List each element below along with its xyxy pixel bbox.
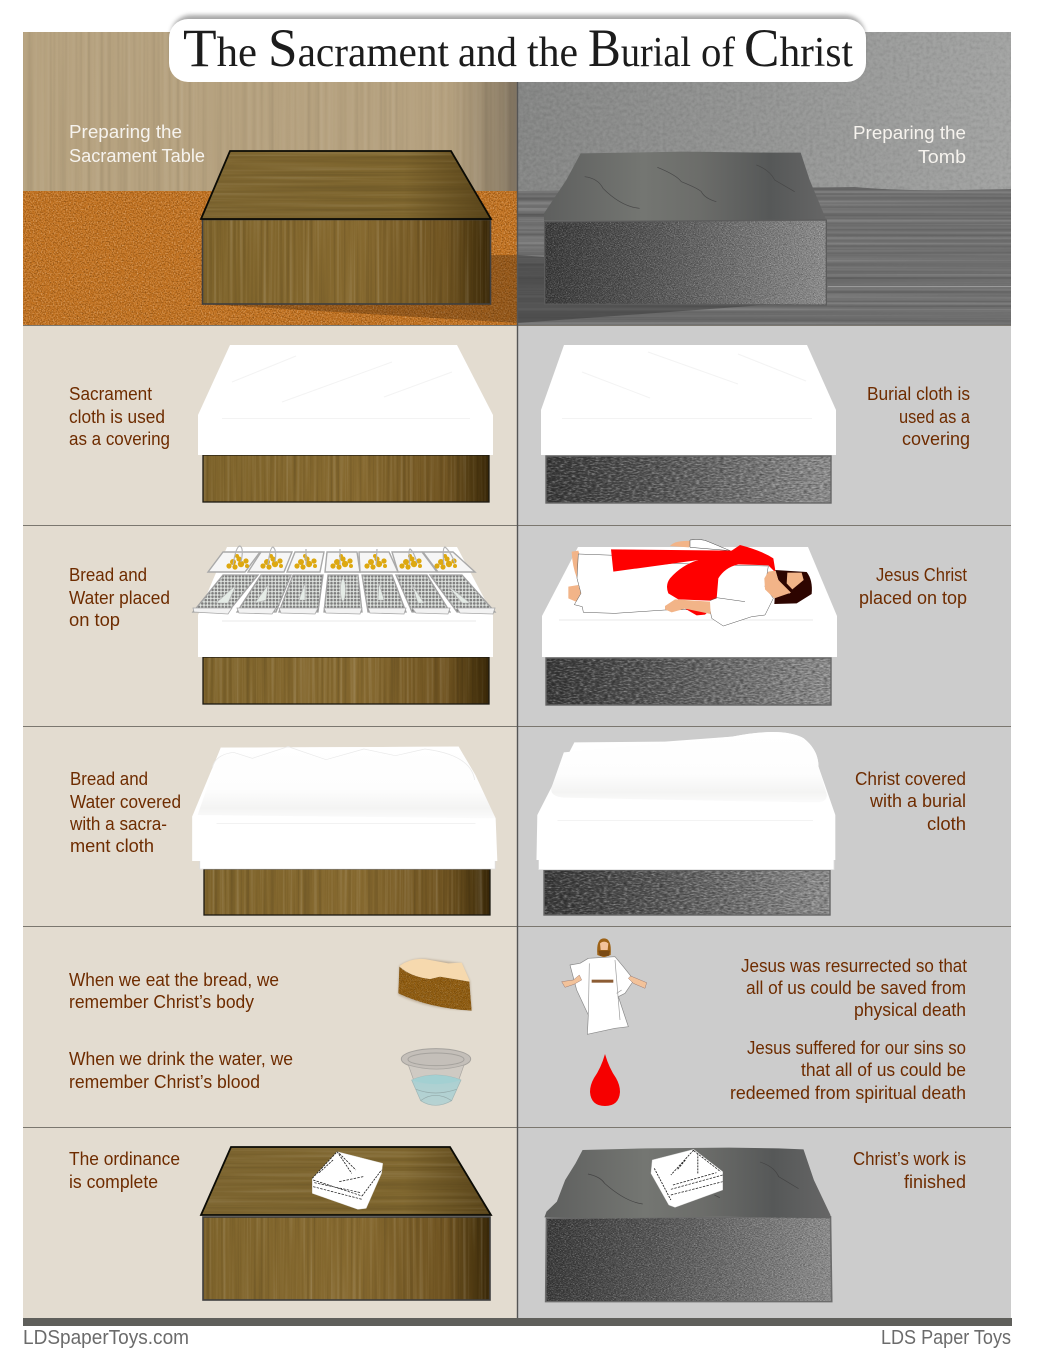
text: Christ covered: with a burial <box>869 791 966 811</box>
front outline <box>203 1217 490 1300</box>
stone slab <box>544 1148 832 1302</box>
text: ordinance complete: is complete <box>69 1172 158 1192</box>
table front <box>204 869 490 915</box>
text: burial cloth: used as a <box>899 407 971 427</box>
tray centres <box>216 579 470 603</box>
stone front <box>544 870 830 915</box>
stone outline <box>544 870 830 915</box>
white cloth <box>198 345 493 455</box>
table top outline <box>201 151 491 219</box>
text: bread and water: on top <box>69 610 120 630</box>
cloth creases <box>222 356 470 418</box>
text: water <box>69 1049 293 1092</box>
text: burial cloth: Burial cloth is <box>867 384 970 404</box>
stone outline <box>546 658 831 705</box>
text: sacrament cloth: Sacrament <box>69 384 152 404</box>
title banner: and <box>458 30 517 76</box>
panel: tomb scene <box>518 32 1011 325</box>
icon: bread <box>398 959 472 1011</box>
text: ordinance complete <box>69 1149 180 1192</box>
bread pieces <box>226 554 457 570</box>
row 3 right: Jesus on slab <box>542 539 967 705</box>
sky <box>518 32 1011 192</box>
ground <box>518 187 1011 325</box>
icon: blood drop <box>590 1054 620 1106</box>
front outline <box>203 455 489 502</box>
row 4 left: bread and water covered <box>69 747 497 915</box>
text: resurrected: all of us could be saved from <box>746 978 966 998</box>
table front <box>203 455 489 502</box>
row 3 left: bread and water on table <box>69 546 495 704</box>
carpet floor <box>23 191 518 325</box>
text: sacrament cloth: cloth is used <box>69 407 165 427</box>
tray handles <box>233 546 455 565</box>
title banner: The <box>183 18 257 78</box>
icon: folded napkin <box>651 1149 723 1207</box>
text: burial cloth: covering <box>902 429 970 449</box>
text: suffered: that all of us could be <box>801 1060 966 1080</box>
text: bread: When we eat the bread, we <box>69 970 279 990</box>
text: suffered: redeemed from spiritual death <box>730 1083 966 1103</box>
title banner: the <box>527 30 578 76</box>
text: Christ covered: cloth <box>927 814 966 834</box>
white cloth <box>198 547 493 657</box>
footer left text: LDSpaperToys.com <box>23 1327 189 1349</box>
row 4 right: Christ covered <box>536 732 966 915</box>
text: Christ's work finished <box>853 1149 966 1192</box>
text: bread and water covered <box>69 769 181 856</box>
text: water: remember Christ’s blood <box>69 1072 260 1092</box>
white cloth <box>542 547 837 657</box>
cloth creases <box>562 352 812 418</box>
table front <box>203 220 490 304</box>
cloth crease <box>559 619 813 621</box>
text: Jesus placed on top: Jesus Christ <box>876 565 967 585</box>
text: sacrament cloth: as a covering <box>69 429 170 449</box>
table shadow <box>203 255 518 323</box>
text: bread <box>69 970 279 1012</box>
front outline <box>203 657 489 704</box>
covering cloth <box>192 747 497 869</box>
text: suffered: Jesus suffered for our sins so <box>747 1038 966 1058</box>
front outline <box>204 869 490 915</box>
text: bread and water: Water placed <box>69 588 170 608</box>
label: preparing the tomb: Tomb <box>918 146 966 167</box>
cloth crease <box>222 620 476 622</box>
text: Jesus placed on top <box>859 565 967 608</box>
panel: right column background <box>518 325 1011 1318</box>
tomb shadow <box>518 255 778 323</box>
text: resurrected: physical death <box>854 1000 966 1020</box>
icon: water cup <box>401 1049 471 1105</box>
row 2 left: sacrament cloth <box>69 345 493 502</box>
text: Christ covered <box>855 769 966 834</box>
water trays <box>193 575 495 612</box>
row 5 left: symbols <box>69 959 472 1105</box>
text: ordinance complete: The ordinance <box>69 1149 180 1169</box>
footer bar <box>23 1318 1012 1326</box>
bread trays <box>208 552 475 572</box>
row 6 right: work finished <box>544 1148 966 1302</box>
text: Jesus placed on top: placed on top <box>859 588 967 608</box>
text: bread: remember Christ’s body <box>69 992 254 1012</box>
text: bread and water covered: ment cloth <box>70 836 154 856</box>
title banner: Burial <box>588 18 691 78</box>
label: preparing the tomb: Preparing the <box>853 122 966 143</box>
panel: sacrament table scene <box>23 32 518 325</box>
footer right text: LDS Paper Toys <box>881 1327 1011 1349</box>
white cloth <box>541 345 836 455</box>
icon: folded napkin <box>312 1152 383 1209</box>
text: bread and water covered: Bread and <box>70 769 148 789</box>
table edge <box>202 220 490 304</box>
table top <box>201 151 491 219</box>
row 6 left: ordinance complete <box>69 1147 491 1300</box>
table front <box>203 657 489 704</box>
text: sacrament cloth <box>69 384 170 449</box>
title banner: Christ <box>744 18 853 78</box>
wall <box>23 32 518 191</box>
table front <box>203 1217 490 1300</box>
text: resurrected: Jesus was resurrected so that <box>741 956 967 976</box>
text: suffered <box>730 1038 966 1103</box>
table top <box>201 1147 491 1215</box>
covering cloth <box>536 732 835 870</box>
row 5 right: meanings <box>562 938 967 1106</box>
table top outline <box>201 1147 491 1215</box>
stone slab top <box>544 152 826 221</box>
text: water: When we drink the water, we <box>69 1049 293 1069</box>
text: Christ covered: Christ covered <box>855 769 966 789</box>
label: preparing the sacrament table: Preparing the <box>69 121 182 142</box>
stone front <box>546 658 831 705</box>
text: bread and water: Bread and <box>69 565 147 585</box>
text: resurrected <box>741 956 967 1020</box>
icon: resurrected Christ <box>562 938 647 1034</box>
text: bread and water covered: Water covered <box>70 792 181 812</box>
text: burial cloth <box>867 384 971 449</box>
label: preparing the tomb <box>853 122 966 167</box>
label: preparing the sacrament table: Sacrament Table <box>69 145 205 166</box>
stone front <box>546 456 831 503</box>
title banner: of <box>701 30 735 76</box>
panel: left column background <box>23 325 518 1318</box>
text: bread and water covered: with a sacra- <box>69 814 167 834</box>
text: bread and water <box>69 565 170 630</box>
row 2 right: burial cloth <box>541 345 971 503</box>
figure: Christ laid out <box>568 539 812 626</box>
label: preparing the sacrament table <box>69 121 205 166</box>
title banner <box>169 15 866 82</box>
stone outline <box>546 456 831 503</box>
ground highlight <box>828 286 1011 287</box>
text: Christ's work finished: Christ’s work is <box>853 1149 966 1169</box>
title banner: Sacrament <box>268 18 449 78</box>
text: Christ's work finished: finished <box>904 1172 966 1192</box>
tray rims <box>193 608 495 614</box>
stone block front <box>545 220 826 305</box>
